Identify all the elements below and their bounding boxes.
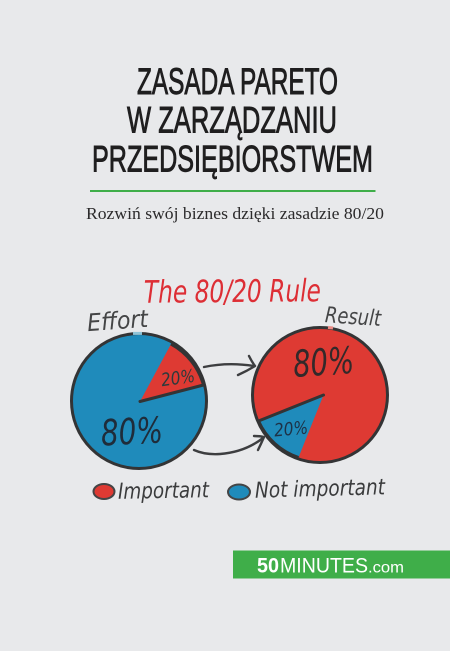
publisher logo bar: .com bbox=[368, 560, 404, 576]
legend: important bbox=[94, 478, 210, 505]
label: Result: Result bbox=[324, 303, 383, 332]
publisher logo bar: MINUTES bbox=[280, 554, 368, 578]
icon: red swatch bbox=[94, 484, 114, 499]
chart heading: The 80/20 Rule bbox=[144, 273, 321, 311]
publisher logo bar bbox=[233, 550, 450, 578]
publisher logo bar: 50 bbox=[257, 554, 279, 578]
pie label: 80%: 80% bbox=[292, 339, 355, 386]
pie label: 20%: 20% bbox=[273, 418, 309, 441]
legend: not important: Not important bbox=[255, 475, 386, 504]
title: W ZARZĄDZANIU bbox=[127, 100, 337, 140]
title: ZASADA PARETO bbox=[137, 61, 338, 102]
subtitle: Rozwiń swój biznes dzięki zasadzie 80/20 bbox=[86, 204, 384, 223]
pie chart: effort bbox=[72, 333, 206, 468]
pie label: 20%: 20% bbox=[160, 366, 196, 391]
title bbox=[92, 61, 373, 180]
pie label: 80%: 80% bbox=[100, 410, 164, 455]
icon: blue swatch bbox=[228, 484, 250, 500]
label: Effort: Effort bbox=[86, 305, 150, 337]
arrow: bottom bbox=[194, 436, 264, 454]
arrow: top bbox=[204, 356, 255, 375]
pie chart: result bbox=[252, 328, 388, 462]
divider line bbox=[90, 190, 376, 192]
legend: important: Important bbox=[118, 478, 210, 505]
